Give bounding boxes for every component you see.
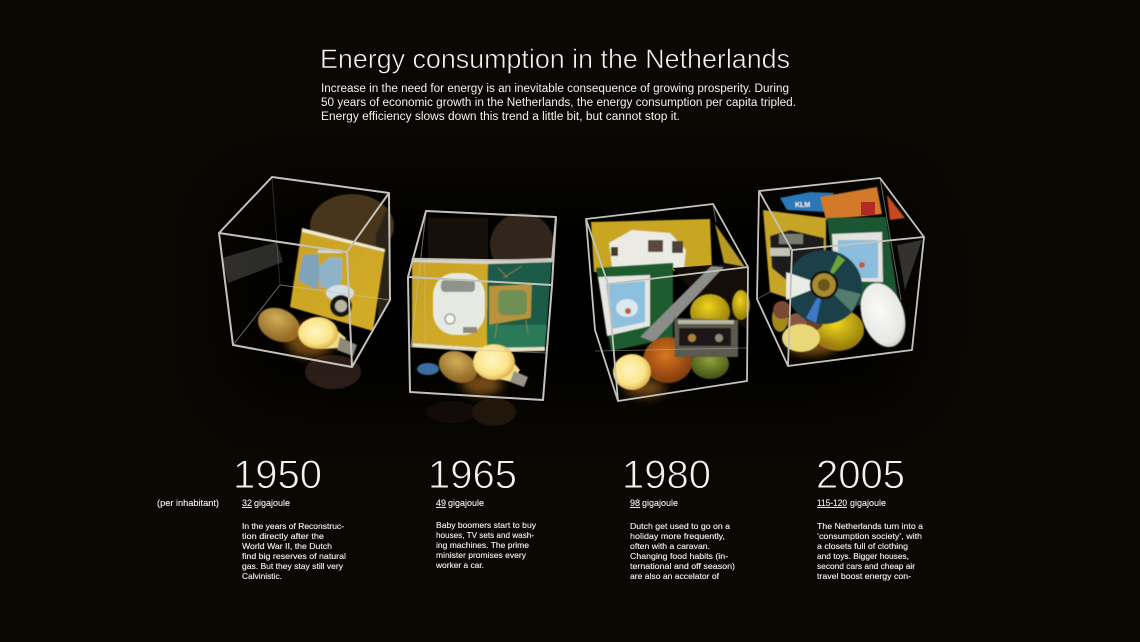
column 1965 (428, 453, 537, 570)
green page with monitor (596, 263, 673, 351)
cube 1980 (586, 204, 750, 401)
description 1950: In the years of Reconstruc- (242, 521, 344, 531)
helmets behind spread (428, 218, 488, 262)
cube edges (219, 177, 390, 367)
warm back wall edge (376, 205, 390, 320)
lychees and lemon (772, 301, 864, 351)
television (489, 266, 532, 338)
KLM bag: KLM (795, 202, 810, 209)
snack packet (820, 187, 882, 220)
value 1980: 98 (630, 498, 640, 508)
bulb warm glow (462, 373, 502, 395)
value 2005 (817, 498, 886, 508)
cube 1965 (408, 211, 556, 426)
cube edges (586, 204, 748, 401)
intro text: Energy efficiency slows down this trend a little bit, but cannot stop it. (321, 111, 680, 123)
description 2005: The Netherlands turn into a (817, 521, 923, 531)
reflection under cube 1965 (426, 398, 516, 426)
glass right wall highlight (897, 240, 922, 290)
light bulb globe (613, 354, 651, 390)
lemons (690, 294, 730, 330)
yellow page with caravan (591, 219, 745, 272)
intro text (321, 83, 796, 123)
reflection under cube 1950 (305, 355, 361, 389)
light bulb (298, 317, 357, 356)
value 1980: gigajoule (642, 498, 678, 508)
bulb warm glow (286, 323, 334, 357)
green page with monitor (827, 217, 898, 308)
description 1965: ing machines. The prime (436, 540, 529, 550)
description 1965: houses, TV sets and wash- (436, 530, 534, 540)
year 1965: 1965 (428, 453, 517, 497)
glowing bulb (782, 324, 820, 352)
year 1950: 1950 (233, 453, 322, 497)
bulb warm glow (625, 379, 665, 397)
helmet behind page 1950 (310, 194, 394, 258)
KLM bag (780, 192, 834, 212)
description 1950: find big reserves of natural (242, 551, 346, 561)
dark background strip (673, 264, 748, 330)
cube edges (757, 178, 924, 366)
beetle car (433, 273, 485, 335)
white mouse (853, 277, 913, 353)
lime (691, 349, 729, 379)
intro text: 50 years of economic growth in the Netherlands, the energy consumption per capita tripled. (321, 97, 796, 109)
description 1980 (630, 521, 735, 581)
blue tag (417, 363, 439, 375)
bulb warm glow (788, 339, 836, 355)
cube edges (408, 211, 556, 400)
cube 1950 (219, 177, 394, 389)
column 1980 (622, 453, 735, 581)
description 1965: minister promises every (436, 550, 527, 560)
description 1950: World War II, the Dutch (242, 541, 332, 551)
intro text: Increase in the need for energy is an inevitable consequence of growing prosperity. During (321, 83, 789, 95)
label: per inhabitant: (per inhabitant) (157, 498, 219, 508)
magazine page with scooter (290, 228, 385, 331)
value 1965: 49 (436, 498, 446, 508)
year 2005: 2005 (816, 453, 905, 497)
glass left wall highlight (222, 242, 283, 283)
cube 2005 (757, 178, 924, 366)
description 1980: often with a caravan. (630, 541, 710, 551)
description 1980: are also an accelator of (630, 571, 720, 581)
value 2005: 115-120 (817, 498, 847, 508)
description 1950 (242, 521, 346, 581)
title: Energy consumption in the Netherlands (320, 44, 790, 74)
description 2005: travel boost energy con- (817, 571, 911, 581)
description 1950: Calvinistic. (242, 571, 282, 581)
description 1950: tion directly after the (242, 531, 324, 541)
description 1980: ternational and off season) (630, 561, 735, 571)
description 1980: Changing food habits (in- (630, 551, 728, 561)
column 1950 (233, 453, 346, 581)
description 1980: Dutch get used to go on a (630, 521, 730, 531)
description 1965: worker a car. (435, 560, 484, 570)
snack logo (861, 202, 875, 215)
year 1980: 1980 (622, 453, 711, 497)
description 1950: gas. But they stay still very (242, 561, 344, 571)
value 1965: gigajoule (448, 498, 484, 508)
value 2005: gigajoule (850, 498, 886, 508)
description 2005: second cars and cheap air (817, 561, 915, 571)
description 2005 (817, 521, 923, 581)
compact disc (786, 250, 862, 324)
description 2005: a closets full of clothing (817, 541, 908, 551)
description 2005: ‘consumption society’, with (817, 531, 922, 541)
description 1965: Baby boomers start to buy (436, 520, 537, 530)
description 2005: and toys. Bigger houses, (817, 551, 909, 561)
potato (434, 345, 482, 389)
orange (643, 337, 693, 383)
value 1950: 32 (242, 498, 252, 508)
description 1980: holiday more frequently, (630, 531, 725, 541)
value 1950: gigajoule (254, 498, 290, 508)
second packet (887, 195, 905, 220)
cassette (674, 318, 738, 357)
yellow page with car (763, 210, 826, 302)
open magazine spread (412, 258, 552, 352)
potato (252, 301, 306, 349)
light bulb (473, 344, 528, 387)
column 2005 (816, 453, 923, 581)
remote control (640, 266, 724, 342)
description 1965 (435, 520, 537, 570)
